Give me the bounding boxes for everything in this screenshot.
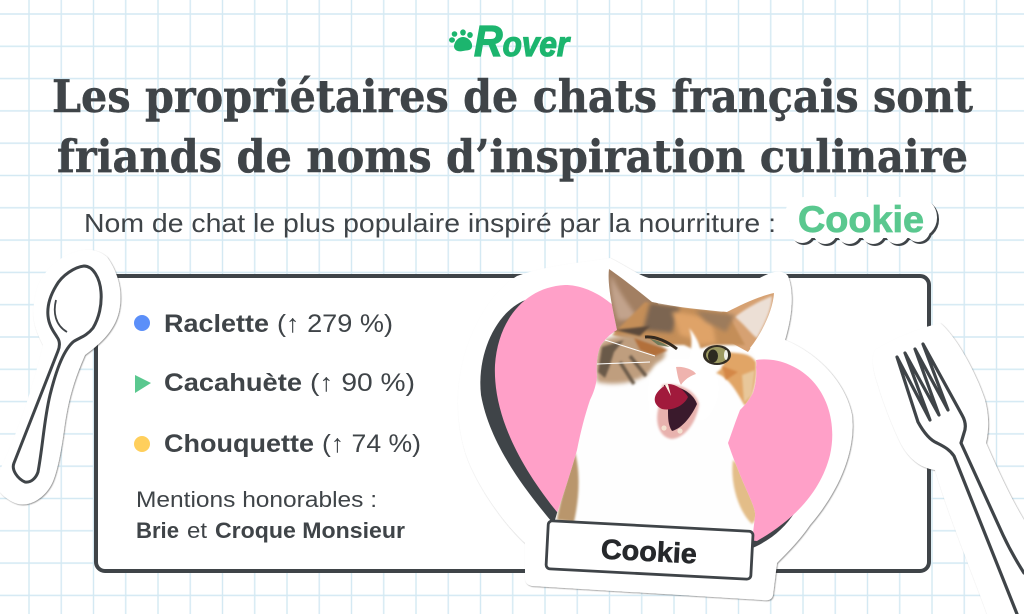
title xyxy=(52,70,973,183)
icon: spoon xyxy=(0,250,120,505)
text block: honourable mentions: Croque Monsieur xyxy=(215,518,405,543)
cat photo illustration xyxy=(555,269,774,532)
list item: Raclette xyxy=(134,310,393,338)
left cheek markings xyxy=(596,336,665,384)
list item: Cacahuète xyxy=(135,369,415,397)
heart shadow xyxy=(480,298,757,555)
right cheek xyxy=(716,350,756,406)
body markings xyxy=(557,452,579,522)
text block: honourable mentions: et xyxy=(187,518,208,543)
nose xyxy=(676,367,696,385)
muzzle xyxy=(648,358,666,375)
head top xyxy=(612,302,745,350)
cat sticker xyxy=(458,258,853,600)
list item: Raclette: (↑ 279 %) xyxy=(277,310,393,338)
pink heart xyxy=(495,285,832,541)
closed eye xyxy=(645,337,677,349)
wordmark: Rover xyxy=(474,16,571,65)
name tag xyxy=(546,521,753,579)
list item: Chouquette: (↑ 74 %) xyxy=(322,430,421,458)
panel: names list xyxy=(96,276,929,571)
callout: Cookie badge xyxy=(784,197,939,246)
text block: honourable mentions: Brie xyxy=(136,518,179,543)
whiskers xyxy=(597,340,655,364)
list item: Chouquette xyxy=(134,430,421,458)
subtitle: Nom de chat le plus populaire inspiré par la nourriture : xyxy=(84,208,776,238)
mouth xyxy=(657,384,699,439)
callout: Cookie badge: Cookie xyxy=(798,199,924,240)
text block: honourable mentions: Mentions honorables : xyxy=(136,487,377,512)
list item: Cacahuète: Cacahuète xyxy=(164,369,302,397)
list item: Cacahuète: (↑ 90 %) xyxy=(310,369,415,397)
icon: fork xyxy=(873,323,1024,614)
open eye xyxy=(703,345,731,365)
name tag: Cookie xyxy=(600,534,698,569)
list item: Chouquette: Chouquette xyxy=(164,430,314,458)
list item: Raclette: Raclette xyxy=(164,310,269,338)
icon: paw xyxy=(449,29,473,51)
right ear xyxy=(722,293,774,352)
left ear xyxy=(608,269,658,332)
text block: honourable mentions xyxy=(136,487,405,543)
Rover logo xyxy=(449,16,571,65)
sticker backing xyxy=(458,258,853,600)
title: friands de noms d’inspiration culinaire xyxy=(57,130,968,183)
